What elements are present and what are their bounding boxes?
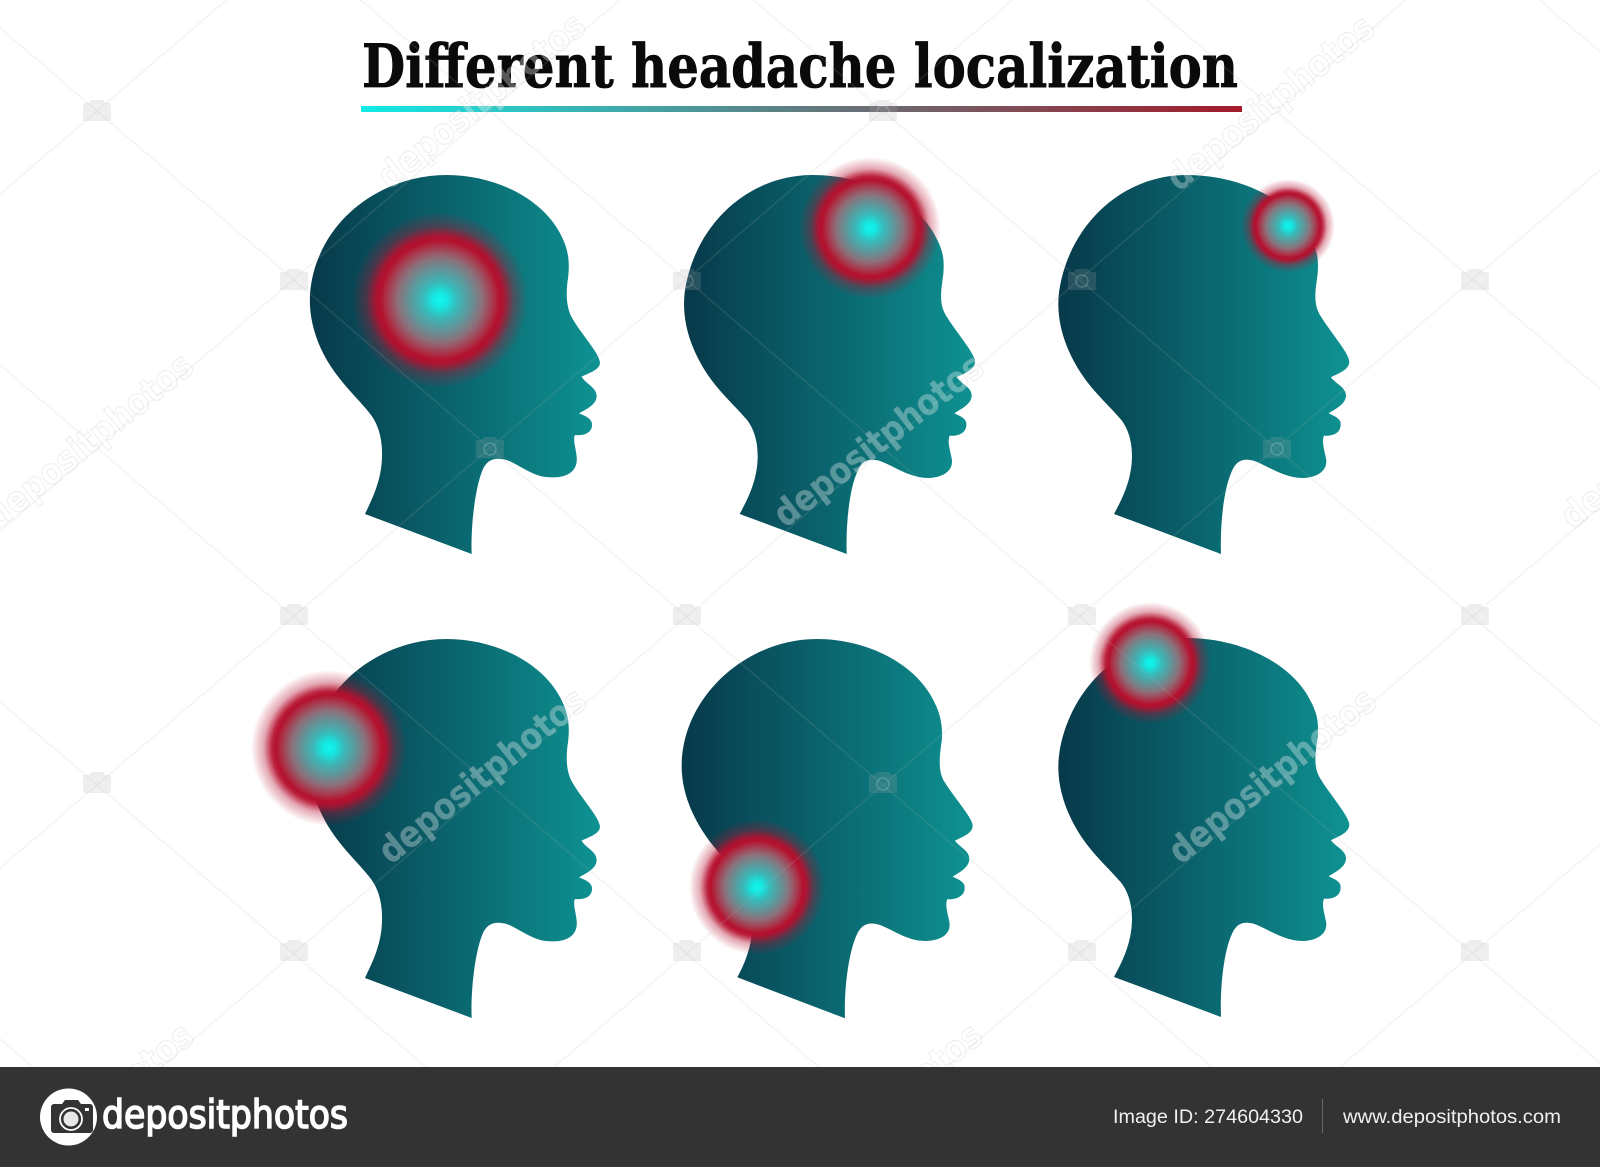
pain spot: back of head [251, 670, 407, 826]
logo wordmark: depositphotos [102, 1093, 348, 1138]
title underline gradient rule [361, 106, 1242, 112]
website url: www.depositphotos.com [1342, 1107, 1561, 1128]
head 2: pain at the forehead top [684, 157, 975, 554]
head 1: pain in the centre of the head [310, 175, 600, 554]
head 3: pain at the front hairline [1058, 175, 1349, 554]
title: Different headache localization [362, 32, 1238, 102]
stock photo watermark: depositphotos [1161, 680, 1385, 872]
pain spot: front hairline [1241, 179, 1335, 273]
pain spot: upper forehead [799, 157, 941, 299]
icon: camera logo [40, 1088, 97, 1146]
stock photo watermark: depositphotos [766, 346, 992, 536]
head 6: pain at the crown [1058, 602, 1349, 1017]
pain spot: crown [1089, 602, 1211, 724]
head 5: pain at the base of the skull [682, 639, 973, 1018]
pain spot: temple [352, 212, 528, 388]
footer bar [0, 1067, 1600, 1167]
stock photo watermark: depositphotos [371, 680, 595, 872]
image id: Image ID: 274604330 [1113, 1107, 1303, 1128]
pain spot: base of skull [689, 819, 825, 955]
head 4: pain at the back of the head [251, 639, 600, 1018]
